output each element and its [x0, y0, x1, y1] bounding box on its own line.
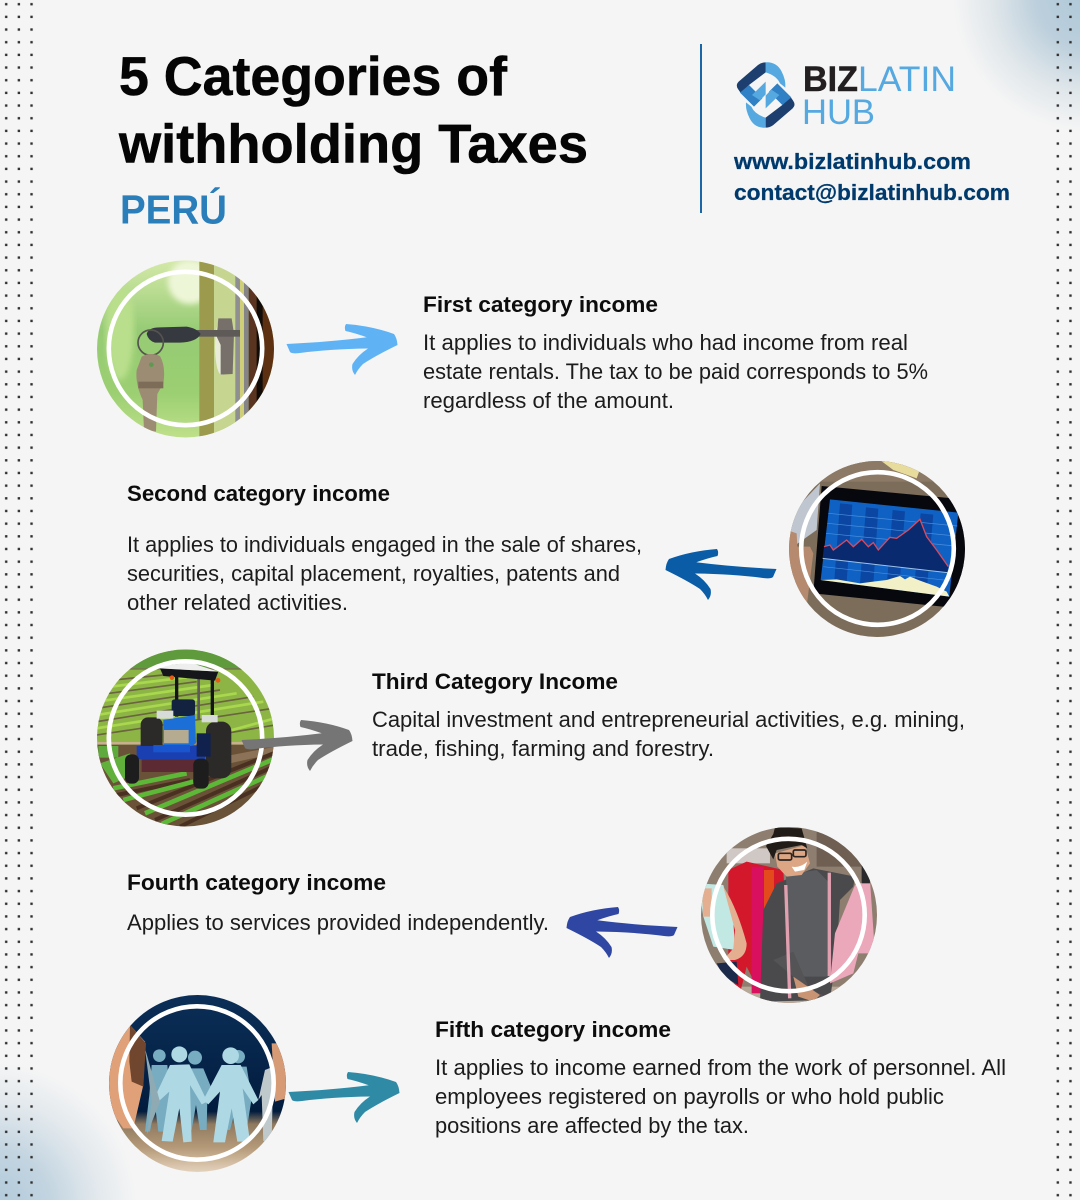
contact details: www.bizlatinhub.com [733, 149, 971, 174]
fifth category text: It applies to income earned from the work of personnel. All [435, 1055, 1006, 1080]
icon: logo mark [737, 62, 795, 128]
photo: tablet with stock chart [787, 457, 970, 643]
first category text: estate rentals. The tax to be paid corresponds to 5% [423, 359, 928, 384]
contact details: contact@bizlatinhub.com [734, 180, 1010, 205]
panel: second category [127, 457, 970, 643]
second category text [127, 532, 642, 615]
logo wordmark [802, 60, 956, 132]
fifth category heading: Fifth category income [435, 1017, 671, 1042]
arrow left [566, 907, 678, 958]
arrow right [286, 324, 398, 375]
second category text: It applies to individuals engaged in the sale of shares, [127, 532, 642, 557]
fourth category heading: Fourth category income [127, 870, 386, 895]
second category text: securities, capital placement, royalties, patents and [127, 561, 620, 586]
third category text: Capital investment and entrepreneurial activities, e.g. mining, [372, 707, 965, 732]
logo wordmark: BIZ [803, 60, 858, 99]
header divider line [700, 44, 702, 213]
photo: tractor in a field [97, 648, 275, 828]
photo ring [712, 839, 865, 991]
third category text: trade, fishing, farming and forestry. [372, 736, 714, 761]
subtitle: country: PERÚ [120, 186, 227, 232]
panel: fourth category [127, 825, 880, 1007]
title line two: withholding Taxes [118, 112, 588, 174]
fifth category text [435, 1055, 1006, 1138]
photo ring [109, 272, 262, 425]
photo ring [109, 661, 262, 815]
contact details [733, 149, 1010, 205]
photo: key in door lock [97, 260, 276, 440]
logo wordmark: HUB [802, 93, 875, 132]
photo: tailor in clothes shop [698, 825, 880, 1007]
first category text: It applies to individuals who had income from real [423, 330, 908, 355]
fifth category text: positions are affected by the tax. [435, 1113, 749, 1138]
fourth category text: Applies to services provided independently. [127, 910, 549, 935]
third category heading: Third Category Income [372, 669, 618, 694]
panel: fifth category [107, 993, 1006, 1175]
third category text [372, 707, 965, 761]
first category text [423, 330, 928, 413]
panel: first category [97, 260, 928, 440]
second category heading: Second category income [127, 481, 390, 506]
logo: Biz Latin Hub [737, 60, 956, 132]
title line one: 5 Categories of [119, 45, 508, 107]
photo: paper people in hands [107, 993, 288, 1175]
arrow left [666, 549, 776, 600]
photo ring [801, 472, 954, 625]
arrow right [288, 1072, 400, 1123]
arrow right [242, 720, 352, 771]
second category text: other related activities. [127, 590, 348, 615]
title [118, 45, 588, 232]
logo wordmark: LATIN [858, 60, 956, 99]
panel: third category [97, 648, 965, 828]
first category heading: First category income [423, 292, 658, 317]
photo ring [120, 1006, 274, 1160]
fifth category text: employees registered on payrolls or who hold public [435, 1084, 944, 1109]
first category text: regardless of the amount. [423, 388, 674, 413]
